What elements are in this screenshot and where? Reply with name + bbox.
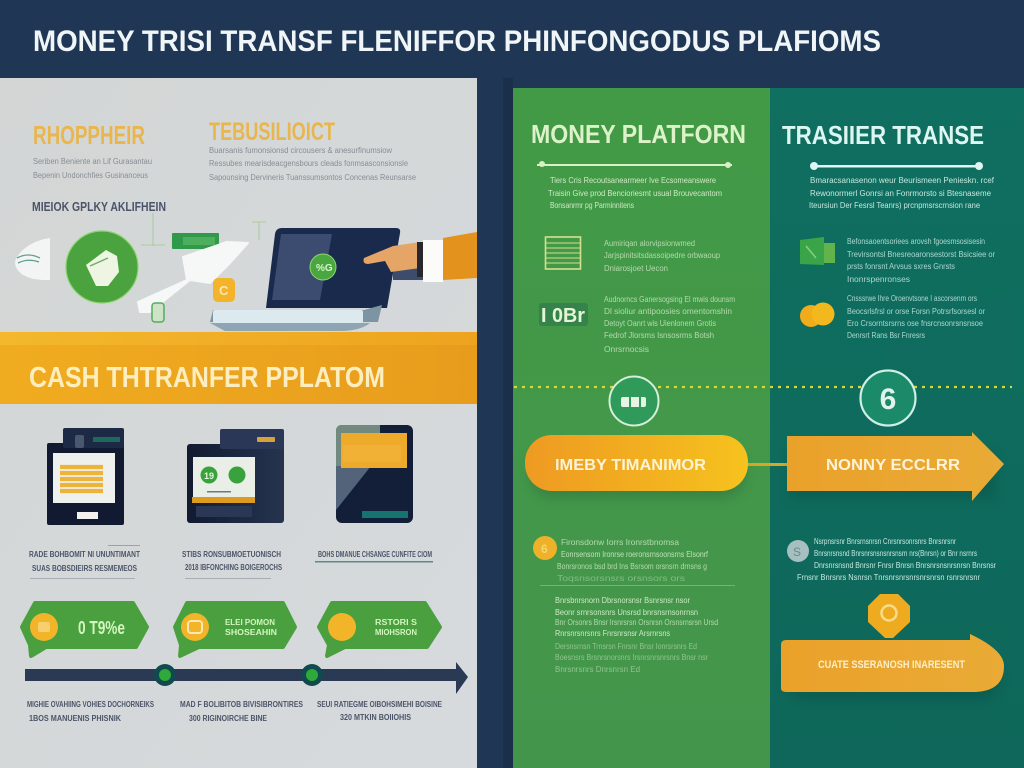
icon: teal numbered ring: 6	[880, 383, 896, 416]
illustration: payment scene	[15, 213, 477, 331]
text: green lower block	[540, 538, 735, 674]
text: percentage: Dl sioliur antipoosies omentomshin	[604, 307, 732, 316]
icon: amber pin badge	[868, 594, 910, 638]
shadows	[530, 452, 1000, 700]
text: green lower block: Boesnsrs Brsnrsnorsnrs Irsnrsnrsnrsnrs Bnsr nsr	[555, 653, 708, 662]
text: green lower block: Toqsnsorsnsrs orsnsors ors	[557, 574, 685, 583]
panel: teal transfer column	[770, 88, 1024, 768]
callout 2: SHOSEAHIN	[225, 628, 277, 637]
text block: left feature: Bepenin Undonchfies Gusinanceus	[33, 171, 148, 180]
icon: percentage badge: I 0Br	[541, 305, 585, 327]
banner heading: CASH THTRANFER PPLATOM	[29, 362, 385, 394]
text: ledger	[604, 239, 721, 273]
text block: right feature: Buarsanis fumonsionsd circousers & anesurfinumsiow	[209, 146, 392, 155]
captions under devices: 2018 IBFONCHING BOIGEROCHS	[185, 563, 283, 572]
timeline captions	[27, 700, 443, 723]
laptop base	[210, 305, 382, 331]
text: percentage	[604, 295, 735, 354]
timeline captions: 1BOS MANUENIS PHISNIK	[29, 714, 121, 723]
callout 1: 0 T9%e	[78, 618, 125, 638]
heading: transfer: TRASIIER TRANSE	[782, 120, 984, 150]
callout 2	[175, 603, 295, 656]
heading: money platform: MONEY PLATFORN	[531, 119, 746, 149]
intro text	[809, 176, 995, 210]
icon: green ring	[610, 376, 658, 426]
heading: right feature: TEBUSILIOICT	[209, 118, 335, 146]
arrow: lower banner	[781, 634, 1004, 692]
text block: right feature	[209, 146, 417, 182]
captions under devices: SUAS BOBSDIEIRS RESMEMEOS	[32, 564, 138, 573]
panel: left cash transfer column	[0, 78, 477, 768]
icon: laptop green badge: %G	[316, 263, 333, 274]
intro text: Iteursiun Der Fesrsl Teanrs) prcnpmsrscrnsion rane	[809, 201, 981, 210]
rule	[810, 162, 983, 170]
lower banner label: CUATE SSERANOSH INARESENT	[818, 659, 965, 671]
text: coins	[847, 294, 985, 340]
icon: white shield blob	[15, 238, 50, 280]
icon: ledger	[546, 237, 580, 269]
icon: gold coins	[800, 302, 834, 327]
panel: green money platform column	[513, 88, 771, 768]
icon: device 3	[336, 425, 413, 523]
timeline captions: 320 MTKIN BOIIOHIS	[340, 713, 412, 722]
text: coins: Beocsrlsfrsl or orse Forsn Potrsrfsorsesl or	[847, 307, 985, 316]
text block: left feature	[33, 157, 152, 180]
timeline captions: SEUI RATIEGME OIBOHSIMEHI BOISINE	[317, 700, 443, 709]
divider strip	[503, 78, 513, 768]
captions under devices	[29, 545, 433, 579]
text: green lower block: Fironsdonw Iorrs Ironrstbnomsa	[561, 538, 680, 547]
timeline captions: MAD F BOLIBITOB BIVISIBRONTIRES	[180, 700, 304, 709]
intro text: Traisin Give prod Bencioriesmt usual Brouvecantom	[548, 189, 722, 198]
icon: green banknote	[172, 233, 219, 249]
text: coins: Ero Crsorntsrsrns ose fnsrcnsonrsnsnsoe	[847, 319, 984, 328]
heading: left feature: RHOPPHEIR	[33, 120, 145, 150]
icon: pointing hand with sleeve	[364, 232, 477, 282]
intro text: Tiers Cris Recoutsanearmeer Ive Ecsomeanswere	[550, 176, 717, 185]
text: coins: Cnsssrwe Ihre Oroenvtsone I ascorsenm ors	[847, 294, 977, 303]
callout 3: RSTORI S	[375, 618, 418, 627]
intro text: Rewonormerl Gonrsi an Fonrmorsto si Btesnaseme	[810, 189, 992, 198]
subheading: MIEIOK GPLKY AKLIFHEIN	[32, 199, 166, 214]
text: green lower block: Eonrsensom Ironrse roeronsrnsoonsrns Elsonrf	[561, 550, 709, 559]
text: green lower block: Bonrsronos bsd brd Ins Bsrsom orsnsrn drnsns g	[557, 562, 707, 571]
pill label: IMEBY TIMANIMOR	[555, 457, 706, 474]
text: wallet: Trevirsontsl Bnesreoaronsestorst Bsicsiee or	[847, 250, 995, 259]
icon: teal numbered ring	[860, 370, 916, 426]
text: wallet: Inonrspenronses	[847, 275, 910, 284]
text: wallet: prsts fonrsnt Arvsus sxres Gnrsts	[847, 262, 955, 271]
icon: small amber coin: 6	[541, 542, 548, 556]
text: green lower block: Bnrsnrsnrs Dnrsnrsn Ed	[555, 665, 640, 674]
rule	[537, 161, 732, 168]
pill: money transaction	[525, 435, 748, 491]
icon: device 1	[47, 428, 124, 525]
text: wallet	[847, 237, 995, 284]
text block: right feature: Ressubes mearisdeacgensbours cleads fonmsasconsionsle	[209, 159, 409, 168]
banner: cash transfer platform	[0, 332, 477, 404]
text: teal lower block: Dnrsnrsnsnd Bnrsnr Fnrsr Bnrsn Bnrsnrsnsnrsnrsn Bnrsnsr	[814, 561, 996, 570]
icon: amber badge: C	[219, 283, 229, 298]
arrow: money receive	[787, 432, 1004, 501]
callout 2: ELEI POMON	[225, 618, 275, 627]
text block: left feature: Seriben Beniente an Lif Gurasantau	[33, 157, 152, 166]
captions under devices: BOHS DMANUE CHSANGE CUNFITE CIOM	[318, 550, 432, 559]
icon: device 2	[187, 429, 284, 523]
text: percentage: Fedrof Jlorsms Isnsosrms Botsh	[604, 331, 714, 340]
captions under devices: STIBS RONSUBMOETUONISCH	[182, 550, 281, 559]
text: teal lower block	[797, 537, 996, 582]
icon: small amber coin	[533, 536, 557, 560]
faint stems	[141, 213, 266, 246]
title: MONEY TRISI TRANSF FLENIFFOR PHINFONGODUS PLAFIOMS	[33, 25, 881, 58]
text: teal lower block: Bnrsnrsnsnd Bnrsnrsnsnsnrsnsrn nrs(Bnrsn) or Bnr nsrnrs	[814, 549, 977, 558]
text: green lower block: Bnrsbnrsnorn Dbrsnorsnsr Bsnrsnsr nsor	[555, 596, 690, 605]
text: ledger: Dniarosjoet Uecon	[604, 264, 668, 273]
text: ledger: Jarjspinitsitsdassoipedre orbwaoup	[604, 251, 721, 260]
intro text: Bmaracsanasenon weur Beurismeen Penieskn. rcef	[810, 176, 995, 185]
icon: grey coin: S	[793, 545, 801, 559]
text: green lower block: Dersnsrnsn Trnsrsn Fnrsnr Bnsr Ionrsrsnrs Ed	[555, 642, 697, 651]
timeline captions: 300 RIGINOIRCHE BINE	[189, 714, 268, 723]
text: teal lower block: Frnsnr Bnrsnrs Nsnrsn Tnrsnrsnrsnrsnrsnrsn rsnrsnrsnr	[797, 573, 980, 582]
text: ledger: Aumiriqan alorvipsionwmed	[604, 239, 695, 248]
text block: right feature: Sapounsing Dervineris Tuanssumsontos Concenas Reunsarse	[209, 173, 417, 182]
dotted divider	[514, 386, 1012, 388]
intro text	[548, 176, 722, 210]
text: green lower block: Beonr srnrsonsnrs Unsrsd bnrsnsrnsonrnsn	[555, 608, 698, 617]
text: percentage: Audnorncs Ganersogsing El mwis dounsm	[604, 295, 735, 304]
intro text: Bonsanrmr pg Parminnitens	[550, 201, 634, 210]
icon: small green jar	[152, 303, 164, 322]
icon: white hand	[138, 242, 248, 312]
text: green lower block: Rnrsnrsnrsnrs Fnrsnrsnsr Arsrnrsns	[555, 629, 670, 638]
callout 3: MIOHSRON	[375, 628, 417, 637]
callout 1	[22, 603, 147, 656]
timeline arrow	[25, 662, 468, 694]
timeline captions: MIGHIE OVAHIING VOHIES DOCHORNEIKS	[27, 700, 155, 709]
text: teal lower block: Nsrpnsrsnr Bnrsrnsnrsn Cnrsnrsonrsnrs Bnrsnrsnr	[814, 537, 956, 546]
text: wallet: Befonsaoentsoriees arovsh fgoesmsosisesin	[847, 237, 985, 246]
icon: amber badge	[213, 278, 235, 302]
laptop screen	[266, 228, 400, 308]
captions under devices: RADE BOHBOMIT NI UNUNTIMANT	[29, 550, 140, 559]
icon: green wallet	[800, 237, 835, 265]
text: coins: Denrsrt Rans Bsr Fnresrs	[847, 331, 925, 340]
icon: grey coin	[787, 540, 809, 562]
text: percentage: Onrsrnocsis	[604, 345, 649, 354]
text: green lower block: Bnr Orsonrs Bnsr Irsnrsrsn Orsnrsn Orsnsrnsrsn Ursd	[555, 618, 718, 627]
callout 3	[319, 603, 440, 656]
connector	[745, 463, 790, 466]
icon: device 2: 19	[204, 471, 214, 481]
icon: green circle	[66, 231, 138, 303]
text: percentage: Detoyt Oanrt wis Uienlonem Grotis	[604, 319, 716, 328]
arrow label: NONNY ECCLRR	[826, 457, 960, 474]
